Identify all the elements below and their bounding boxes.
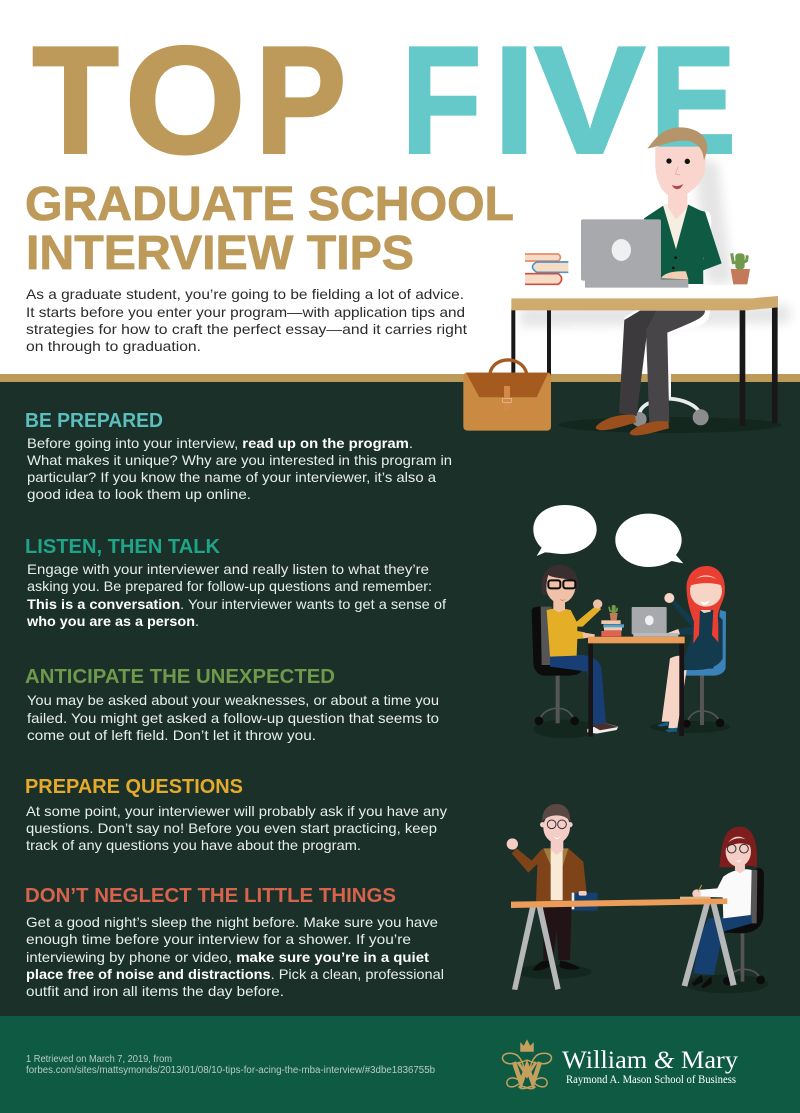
section: be prepared: good idea to look them up online. bbox=[27, 486, 251, 502]
title: top five: O bbox=[125, 15, 245, 185]
chair bbox=[623, 210, 711, 427]
section: anticipate the unexpected: failed. You might get asked a follow-up question that seems to bbox=[27, 710, 439, 726]
section: don't neglect the little things: outfit and iron all items the day before. bbox=[26, 983, 284, 999]
section: prepare questions: track of any questions you have about the program. bbox=[26, 837, 361, 853]
section: be prepared bbox=[25, 410, 452, 502]
illustration: two people at long table bbox=[507, 804, 768, 993]
gold divider band bbox=[0, 374, 800, 382]
man bbox=[596, 127, 722, 436]
logo: wordmark bbox=[562, 1047, 739, 1086]
section: don't neglect the little things: DON’T NEGLECT THE LITTLE THINGS bbox=[25, 885, 396, 907]
logo: wordmark: William & Mary bbox=[562, 1047, 739, 1074]
section: prepare questions: PREPARE QUESTIONS bbox=[25, 776, 243, 798]
section: be prepared: What makes it unique? Why are you interested in this program in bbox=[27, 452, 452, 468]
footnote: forbes.com/sites/mattsymonds/2013/01/08/10-tips-for-acing-the-mba-interview/#3dbe1836755b bbox=[26, 1065, 435, 1076]
heading: graduate school interview tips bbox=[25, 178, 514, 280]
section: prepare questions: questions. Don’t say no! Before you even start practicing, keep bbox=[26, 820, 437, 836]
section: be prepared: Before going into your interview, read up on the program . bbox=[27, 435, 413, 451]
title: top five bbox=[32, 15, 736, 186]
section: be prepared: particular? If you know the name of your interviewer, it’s also a bbox=[27, 469, 436, 485]
intro text bbox=[26, 286, 467, 354]
woman writing bbox=[692, 827, 765, 988]
section: prepare questions bbox=[25, 776, 447, 853]
section: anticipate the unexpected bbox=[25, 666, 439, 743]
cactus plant bbox=[731, 253, 750, 284]
title: top five: I bbox=[494, 15, 535, 185]
floor shadow bbox=[558, 417, 782, 433]
title: top five: E bbox=[650, 15, 736, 185]
section: don't neglect the little things bbox=[25, 885, 444, 999]
long table bbox=[511, 897, 737, 990]
section: prepare questions: At some point, your interviewer will probably ask if you have any bbox=[26, 803, 447, 819]
dark lower panel bbox=[0, 382, 800, 1016]
floor shadows bbox=[515, 964, 768, 993]
section: don't neglect the little things: interviewing by phone or video, make sure you’re in a quiet bbox=[26, 949, 429, 965]
title: top five: F bbox=[402, 16, 481, 186]
section: listen, then talk: asking you. Be prepared for follow-up questions and remember: bbox=[27, 578, 432, 594]
footnote bbox=[26, 1054, 435, 1076]
section: listen, then talk: Engage with your interviewer and really listen to what they’re bbox=[27, 561, 429, 577]
desk bbox=[511, 285, 778, 426]
footnote: 1 Retrieved on March 7, 2019, from bbox=[26, 1054, 172, 1065]
section: listen, then talk: LISTEN, THEN TALK bbox=[25, 536, 221, 558]
intro text: strategies for how to craft the perfect essay—and it carries right bbox=[26, 321, 467, 337]
section: listen, then talk: who you are as a person . bbox=[26, 613, 199, 629]
man with jacket bbox=[507, 804, 598, 971]
briefcase bbox=[463, 360, 551, 431]
illustration: two people talking bbox=[532, 505, 730, 738]
logo: royal cypher bbox=[503, 1041, 551, 1089]
section: listen, then talk bbox=[25, 536, 446, 629]
section: don't neglect the little things: enough time before your interview for a shower. If you’re bbox=[26, 931, 411, 947]
section: anticipate the unexpected: You may be asked about your weaknesses, or about a time you bbox=[27, 692, 439, 708]
intro text: on through to graduation. bbox=[26, 338, 201, 354]
title: top five: P bbox=[255, 15, 346, 185]
intro text: As a graduate student, you’re going to be fielding a lot of advice. bbox=[26, 286, 464, 302]
laptop bbox=[581, 219, 688, 288]
person left bbox=[532, 565, 618, 734]
soft shadows bbox=[520, 157, 790, 327]
heading: graduate school interview tips: INTERVIEW TIPS bbox=[26, 227, 414, 280]
section: anticipate the unexpected: come out of left field. Don’t let it throw you. bbox=[27, 727, 316, 743]
title: top five: V bbox=[534, 15, 645, 185]
footer band bbox=[0, 1016, 800, 1113]
table with laptop and books bbox=[588, 605, 685, 737]
intro text: It starts before you enter your program—with application tips and bbox=[26, 304, 465, 320]
person right bbox=[657, 566, 726, 732]
heading: graduate school interview tips: GRADUATE SCHOOL bbox=[25, 178, 514, 231]
section: anticipate the unexpected: ANTICIPATE THE UNEXPECTED bbox=[25, 666, 335, 688]
illustration: man at desk bbox=[463, 127, 790, 436]
speech bubble right bbox=[615, 514, 683, 567]
floor shadows bbox=[533, 720, 730, 738]
section: be prepared: BE PREPARED bbox=[25, 410, 163, 432]
speech bubble left bbox=[533, 505, 597, 556]
section: don't neglect the little things: Get a good night’s sleep the night before. Make sure you have bbox=[26, 914, 438, 930]
section: listen, then talk: This is a conversation . Your interviewer wants to get a sense of bbox=[27, 596, 446, 612]
books bbox=[525, 254, 568, 284]
logo: wordmark: Raymond A. Mason School of Business bbox=[566, 1074, 736, 1086]
title: top five: T bbox=[32, 16, 119, 186]
section: don't neglect the little things: place free of noise and distractions . Pick a clean, professional bbox=[26, 966, 444, 982]
